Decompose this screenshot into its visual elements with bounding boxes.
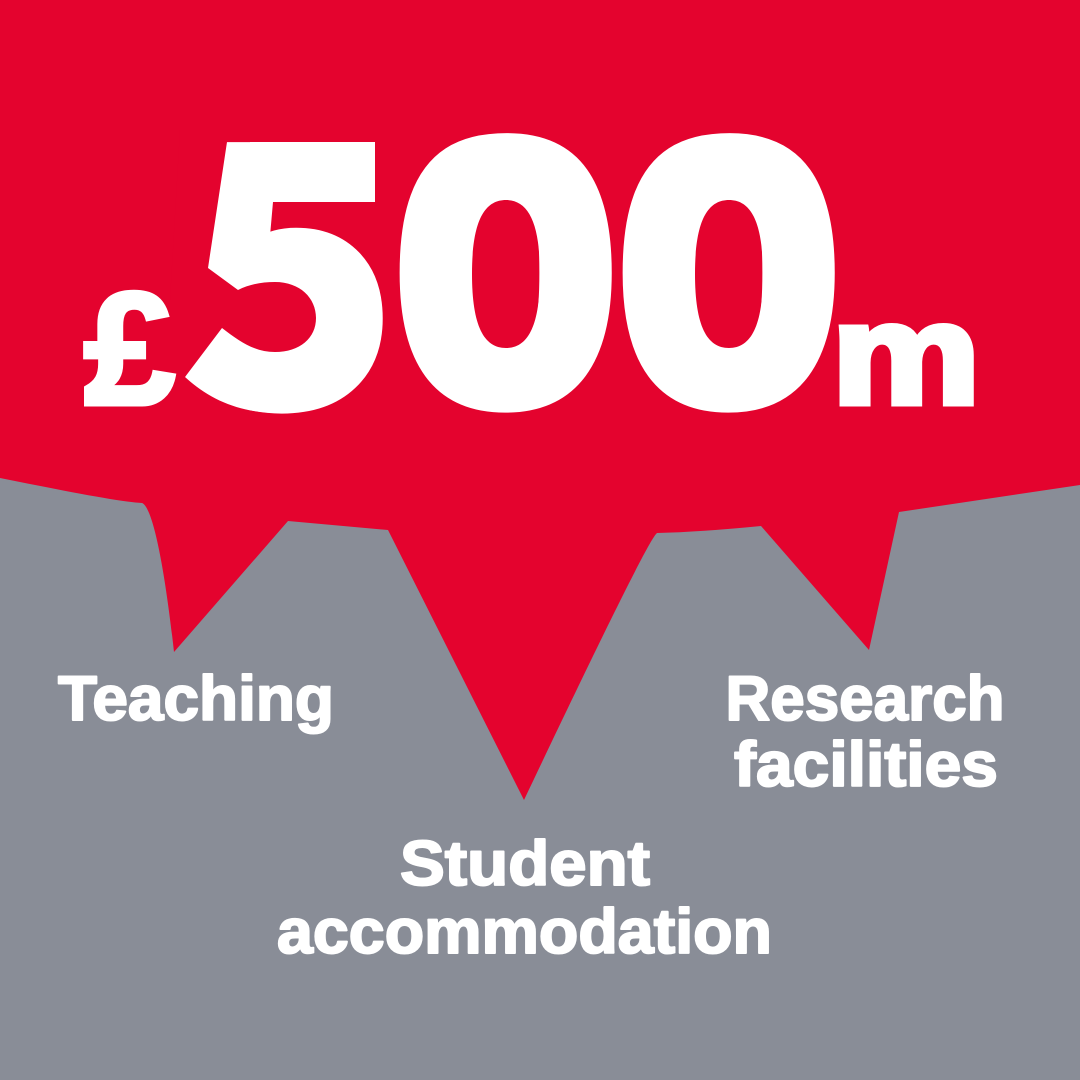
letter m: m bbox=[832, 275, 980, 434]
label: Research facilities: Research bbox=[726, 664, 1004, 734]
label: Student accommodation: Student bbox=[400, 829, 650, 899]
first figure 0: 0 bbox=[391, 64, 621, 482]
label: Student accommodation bbox=[277, 829, 772, 967]
figure 5: 5 bbox=[181, 70, 386, 482]
second figure 0: 0 bbox=[614, 64, 844, 482]
label: Research facilities: facilities bbox=[734, 730, 998, 800]
label: Research facilities bbox=[726, 664, 1004, 800]
red speech shape with three pointers bbox=[0, 0, 1080, 800]
label: Teaching: Teaching bbox=[58, 664, 334, 734]
label: Student accommodation: accommodation bbox=[277, 897, 772, 967]
pound sign: £ bbox=[84, 259, 175, 438]
headline amount bbox=[84, 64, 980, 482]
